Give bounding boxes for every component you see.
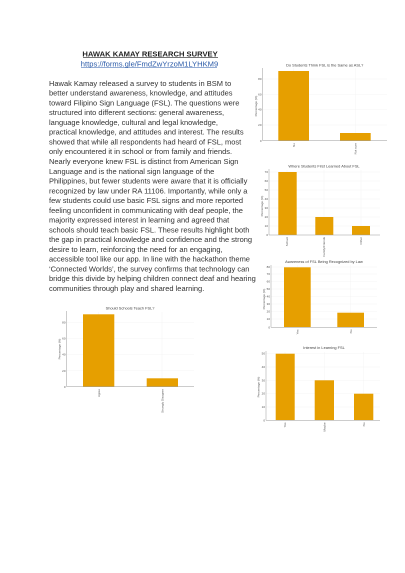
chart: Do Students Think FSL is the Same as ASL?: No [292, 143, 296, 147]
body paragraph: practical knowledge, and attitudes and interest. The results [49, 128, 244, 137]
body paragraph: structured into different sections: general awareness, [49, 108, 224, 117]
chart: Do Students Think FSL is the Same as ASL?: 0 [260, 139, 262, 143]
chart: Where Students First Learned About FSL: Percentage (%) [260, 196, 264, 216]
chart: Where Students First Learned About FSL: 0 [266, 233, 268, 237]
chart: Should Schools Teach FSL?: Agree [97, 389, 101, 397]
body paragraph: schools should teach basic FSL. These results highlight both [49, 225, 249, 234]
body paragraph: Language and is the national sign language of the [49, 167, 214, 176]
body paragraph: accessible tool like our app. In line with the hackathon theme [49, 255, 250, 264]
chart: Awareness of FSL Being Recognized by Law: 50 [267, 287, 270, 291]
chart: Do Students Think FSL is the Same as ASL?: 40 [258, 108, 262, 112]
body paragraph: language knowledge, cultural and legal knowledge, [49, 118, 218, 127]
bars [278, 172, 370, 235]
chart: Should Schools Teach FSL?: Should Schools Teach FSL? [106, 305, 155, 310]
body paragraph: majority expressed interest in learning and agreed that [49, 216, 230, 225]
chart: Should Schools Teach FSL?: 20 [62, 369, 66, 373]
chart: Awareness of FSL Being Recognized by Law: 60 [267, 280, 270, 284]
bars [278, 71, 371, 141]
chart: Interest in Learning FSL: Percentage (%) [256, 377, 260, 397]
chart: Awareness of FSL Being Recognized by Law: 80 [267, 265, 270, 269]
chart: Do Students Think FSL is the Same as ASL?: 20 [258, 123, 262, 127]
chart: Should Schools Teach FSL?: 40 [62, 352, 66, 356]
chart: Do Students Think FSL is the Same as ASL?: Percentage (%) [254, 96, 258, 116]
chart: Interest in Learning FSL: Yes [283, 422, 287, 427]
body paragraph: Hawak Kamay released a survey to students in BSM to [49, 79, 231, 88]
chart: Interest in Learning FSL: 20 [262, 392, 265, 396]
chart: Interest in Learning FSL: 40 [262, 365, 265, 369]
chart: Awareness of FSL Being Recognized by Law: Awareness of FSL Being Recognized by Law [285, 259, 363, 264]
chart: Should Schools Teach FSL?: 80 [62, 320, 66, 324]
title: HAWAK KAMAY RESEARCH SURVEY [82, 49, 218, 58]
chart: Interest in Learning FSL: Interest in Learning FSL [303, 345, 346, 350]
chart: Should Schools Teach FSL? [58, 305, 194, 413]
chart: Awareness of FSL Being Recognized by Law: 20 [267, 310, 270, 314]
chart: Do Students Think FSL is the Same as ASL? [254, 62, 387, 154]
chart: Interest in Learning FSL: 50 [262, 352, 265, 356]
body paragraph: the gap in practical knowledge and confidence and the strong [49, 235, 252, 244]
chart: Should Schools Teach FSL?: Percentage (%) [58, 339, 62, 359]
bars [83, 314, 178, 387]
body paragraph: recognized by law under RA 11106. Importantly, while only a [49, 186, 248, 195]
chart: Where Students First Learned About FSL: School [285, 237, 289, 246]
chart: Where Students First Learned About FSL: Other [359, 237, 363, 245]
chart: Do Students Think FSL is the Same as ASL?: Do Students Think FSL is the Same as ASL? [286, 62, 364, 67]
chart: Where Students First Learned About FSL [260, 163, 380, 257]
chart: Do Students Think FSL is the Same as ASL?: 60 [258, 92, 262, 96]
survey link: https://forms.gle/FmdZwYrzoM1LYHKM9 [81, 60, 218, 69]
chart: Interest in Learning FSL: 0 [263, 418, 265, 422]
chart: Awareness of FSL Being Recognized by Law [262, 259, 377, 334]
body paragraph: better understand awareness, knowledge, and attitudes [49, 89, 233, 98]
chart: Where Students First Learned About FSL: 30 [265, 206, 268, 210]
body paragraph: desire to learn, reinforcing the need for an engaging, [49, 245, 223, 254]
body paragraph: feeling unconfident in communicating with deaf people, the [49, 206, 243, 215]
chart: Where Students First Learned About FSL: 10 [265, 224, 268, 228]
body paragraph: Nearly everyone knew FSL is distinct from American Sign [49, 157, 238, 166]
chart: Should Schools Teach FSL?: Strongly Disagree [160, 389, 164, 413]
body paragraph: only encountered it in school or from family and friends. [49, 147, 232, 156]
chart: Where Students First Learned About FSL: 40 [265, 197, 268, 201]
chart: Should Schools Teach FSL?: 0 [64, 385, 66, 389]
chart: Awareness of FSL Being Recognized by Law: No [349, 329, 353, 333]
body paragraph: Philippines, but fewer students were aware that it is officially [49, 176, 248, 186]
chart: Where Students First Learned About FSL: Family/Friends [322, 237, 326, 257]
chart: Interest in Learning FSL: 10 [262, 405, 265, 409]
chart: Where Students First Learned About FSL: 60 [265, 179, 268, 183]
chart: Awareness of FSL Being Recognized by Law: 70 [267, 272, 270, 276]
chart: Do Students Think FSL is the Same as ASL?: Not sure [354, 143, 358, 154]
chart: Where Students First Learned About FSL: 20 [265, 215, 268, 219]
chart: Awareness of FSL Being Recognized by Law: 10 [267, 317, 270, 321]
body paragraph: toward Filipino Sign Language (FSL). The questions were [49, 98, 239, 107]
body paragraph: showed that while all respondents had heard of FSL, most [49, 138, 242, 146]
body paragraph: ‘Connected Worlds’, the survey confirms that technology can [49, 264, 249, 273]
chart: Do Students Think FSL is the Same as ASL?: 80 [258, 77, 262, 81]
chart: Interest in Learning FSL [256, 345, 380, 432]
bars [284, 267, 364, 327]
chart: Where Students First Learned About FSL: 70 [265, 170, 268, 174]
chart: Where Students First Learned About FSL: Where Students First Learned About FSL [288, 163, 360, 168]
chart: Awareness of FSL Being Recognized by Law: 0 [268, 325, 270, 329]
body paragraph: few students could use basic FSL signs and more reported [49, 196, 243, 205]
chart: Awareness of FSL Being Recognized by Law: Percentage (%) [262, 289, 266, 309]
chart: Awareness of FSL Being Recognized by Law: 40 [267, 294, 270, 298]
chart: Awareness of FSL Being Recognized by Law: 30 [267, 302, 270, 306]
body paragraph: communities through play and shared learning. [49, 284, 204, 293]
chart: Interest in Learning FSL: 30 [262, 378, 265, 382]
chart: Interest in Learning FSL: No [362, 422, 366, 426]
bars [276, 354, 373, 420]
chart: Awareness of FSL Being Recognized by Law: Yes [296, 329, 300, 334]
body paragraph: bridge this divide by helping children connect deaf and hearing [49, 274, 256, 283]
chart: Should Schools Teach FSL?: 60 [62, 336, 66, 340]
chart: Where Students First Learned About FSL: 50 [265, 188, 268, 192]
body paragraph [49, 79, 256, 293]
chart: Interest in Learning FSL: Maybe [322, 422, 326, 432]
